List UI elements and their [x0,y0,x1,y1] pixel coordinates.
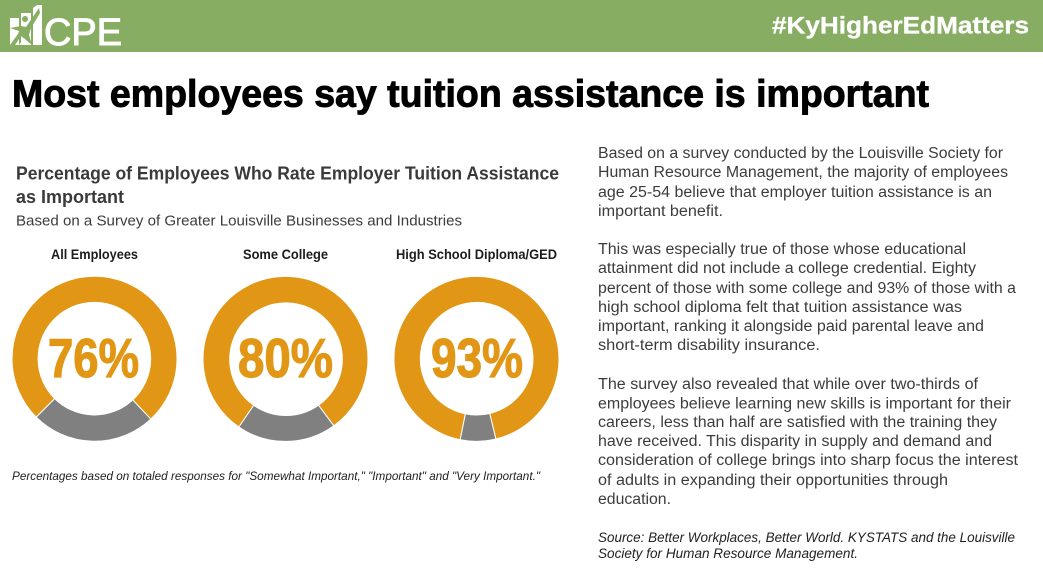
paragraph 3: education. [598,491,671,508]
label: All Employees [51,247,138,262]
paragraph 2: This was especially true of those whose educational [598,241,966,258]
donut: all employees [12,247,177,441]
source note: Society for Human Resource Management. [598,546,858,561]
chart heading: Percentage of Employees Who Rate Employer Tuition Assistance [16,164,559,184]
ring [12,276,177,441]
title: Most employees say tuition assistance is important [12,74,929,116]
source note: Source: Better Workplaces, Better World. KYSTATS and the Louisville [598,530,1015,545]
paragraph 3 [598,376,1019,508]
paragraph 2 [598,241,1016,354]
hashtag: #KyHigherEdMatters [772,12,1029,40]
chart heading: as Important [16,187,124,207]
chart heading [16,164,559,207]
value: 93% [431,327,523,389]
paragraph 3: of adults in expanding their opportunities through [598,472,948,489]
source note [598,530,1015,561]
paragraph 2: short-term disability insurance. [598,337,820,354]
ring [203,276,368,441]
icon: rising figure and bars [10,5,42,45]
paragraph 3: have received. This disparity in supply and demand and [598,433,992,450]
logo: CPE [10,5,122,54]
paragraph 1 [598,145,1008,220]
value: 76% [48,327,139,389]
value: 80% [238,327,333,389]
paragraph 1: important benefit. [598,203,723,220]
paragraph 3: employees believe learning new skills is important for their [598,396,1011,412]
paragraph 2: high school diploma felt that tuition assistance was [598,299,962,316]
chart footnote: Percentages based on totaled responses for "Somewhat Important," "Important" and "Very Important." [12,469,541,483]
paragraph 2: important, ranking it alongside paid parental leave and [598,318,984,335]
donut: some college [203,247,368,441]
donut: high school diploma/GED [394,247,559,441]
label: High School Diploma/GED [396,247,557,262]
paragraph 1: age 25-54 believe that employer tuition assistance is an [598,184,992,201]
paragraph 3: careers, less than half are satisfied with the training they [598,414,997,431]
paragraph 2: attainment did not include a college credential. Eighty [598,260,976,277]
paragraph 1: Based on a survey conducted by the Louisville Society for [598,145,1003,162]
paragraph 3: consideration of college brings into sharp focus the interest [598,452,1019,469]
ring [394,276,559,441]
logo wordmark: CPE [44,12,122,54]
chart subtitle: Based on a Survey of Greater Louisville Businesses and Industries [16,213,462,230]
paragraph 2: percent of those with some college and 93% of those with a [598,280,1016,297]
label: Some College [243,247,328,262]
paragraph 1: Human Resource Management, the majority of employees [598,164,1008,181]
paragraph 3: The survey also revealed that while over two-thirds of [598,376,979,393]
header band [0,0,1043,54]
